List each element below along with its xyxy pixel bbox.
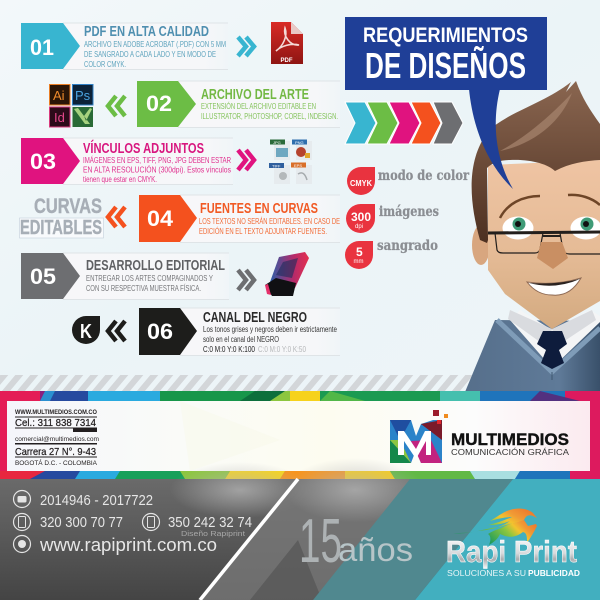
step 06: Canal del negro: solo en el canal del NEGRO bbox=[203, 335, 279, 344]
icon: PDF file: PDF bbox=[280, 58, 293, 64]
diagonal stripes band bbox=[0, 375, 472, 391]
icon: PDF file bbox=[271, 22, 303, 64]
character glasses bbox=[488, 232, 600, 254]
character eyes bbox=[502, 216, 600, 240]
step 05: Desarrollo editorial: ENTREGAR LOS ARTES COMPAGINADOS Y bbox=[86, 274, 214, 283]
contact details: Cel.: 311 838 7314 bbox=[15, 417, 96, 429]
character face bbox=[488, 160, 600, 329]
step 03: Vínculos adjuntos: IMÁGENES EN EPS, TIFF, PNG, JPG DEBEN ESTAR bbox=[83, 156, 231, 165]
step 03: Vínculos adjuntos bbox=[21, 138, 233, 184]
requirement: 5 mm bleed: 5 bbox=[356, 245, 363, 259]
illustration: curvas editables: EDITABLES bbox=[20, 217, 102, 239]
step 01: PDF en alta calidad: COLOR CMYK. bbox=[84, 60, 126, 69]
step 01: PDF en alta calidad bbox=[21, 23, 228, 70]
character ear bbox=[472, 225, 490, 265]
arrow: 05 to magazine bbox=[238, 270, 254, 290]
contact details bbox=[15, 409, 99, 467]
requirement: 5 mm bleed bbox=[345, 238, 438, 269]
requirement: 300 dpi images: dpi bbox=[355, 224, 363, 230]
character hair highlight bbox=[500, 93, 572, 151]
step 02: Archivo del arte: ILLUSTRATOR, PHOTOSHOP, COREL, INDESIGN. bbox=[201, 112, 338, 121]
logo: Rapi Print wordmark: Rapi Print bbox=[446, 534, 577, 569]
title speech bubble bbox=[345, 17, 547, 189]
requirement: CMYK colour mode: modo de color bbox=[378, 168, 470, 184]
requirement: 5 mm bleed: mm bbox=[354, 259, 364, 265]
icons: image file types: PNG bbox=[295, 140, 304, 145]
step 05: Desarrollo editorial: 05 bbox=[30, 264, 56, 289]
15 años: 15 bbox=[299, 507, 342, 576]
contact details: comercial@multimedios.com bbox=[15, 436, 99, 443]
contact: mobile numbers: 320 300 70 77 bbox=[40, 515, 123, 531]
15 años: años bbox=[338, 531, 413, 568]
step 02: Archivo del arte: ARCHIVO DEL ARTE bbox=[201, 87, 309, 103]
character nose bbox=[537, 242, 568, 269]
step 03: Vínculos adjuntos: tienen que estar en CMYK. bbox=[83, 175, 157, 184]
step 03: Vínculos adjuntos: 03 bbox=[30, 149, 56, 174]
step 06: Canal del negro: Los tonos grises y negros deben ir estrictamente bbox=[203, 325, 337, 334]
arrow: 02 to software icons bbox=[108, 96, 125, 116]
icons: design software bbox=[50, 84, 93, 127]
illustration: curvas editables: CURVAS bbox=[34, 195, 102, 218]
step 05: Desarrollo editorial: DESARROLLO EDITORIAL bbox=[86, 258, 225, 274]
icons: design software: Ai bbox=[53, 88, 65, 103]
step 03: Vínculos adjuntos: EN ALTA RESOLUCIÓN (300dpi). Estos vínculos bbox=[83, 166, 231, 174]
step 06: Canal del negro: C:0 M:0 Y:0 K:100 bbox=[203, 345, 255, 354]
step 06: Canal del negro: C:0 M:0 Y:0 K:50 bbox=[258, 345, 306, 354]
contact: website: www.rapiprint.com.co bbox=[39, 535, 217, 555]
requirement: 5 mm bleed: sangrado bbox=[377, 238, 438, 254]
logo: Rapi Print wordmark: SOLUCIONES A SU bbox=[447, 568, 526, 578]
contact: phone: 2014946 - 2017722 bbox=[40, 493, 153, 509]
step 04: Fuentes en curvas: LOS TEXTOS NO SERÁN EDITABLES. EN CASO DE bbox=[199, 217, 340, 226]
icon: magazine bbox=[265, 252, 309, 296]
illustration: curvas editables bbox=[20, 195, 104, 239]
contact: mobile numbers: Diseño Rapiprint bbox=[181, 529, 246, 538]
requirement: CMYK colour mode: CMYK bbox=[350, 179, 372, 188]
step 03: Vínculos adjuntos: VÍNCULOS ADJUNTOS bbox=[83, 140, 204, 157]
title speech bubble: DE DISEÑOS bbox=[365, 44, 526, 86]
arrow: 04 to curvas bbox=[108, 207, 125, 227]
logo: Multimedios wordmark: COMUNICACIÓN GRÁFICA bbox=[451, 448, 570, 457]
character mouth bbox=[527, 278, 581, 295]
requirement: 300 dpi images: 300 bbox=[351, 210, 371, 224]
footer background bbox=[0, 458, 600, 600]
contact panel bbox=[7, 401, 590, 471]
requirement: 300 dpi images bbox=[346, 204, 439, 233]
step 01: PDF en alta calidad: ARCHIVO EN ADOBE ACROBAT (.PDF) CON 5 MM bbox=[84, 40, 226, 49]
icons: design software: Id bbox=[54, 110, 65, 125]
step 02: Archivo del arte bbox=[137, 81, 340, 128]
contact details: WWW.MULTIMEDIOS.COM.CO bbox=[15, 409, 97, 416]
character: designer bbox=[465, 81, 600, 392]
icons: image file types: JPG bbox=[273, 140, 281, 145]
icons: design software: Ps bbox=[75, 88, 91, 103]
step 05: Desarrollo editorial bbox=[21, 253, 229, 300]
arrow: 01 to PDF bbox=[238, 37, 254, 56]
step 04: Fuentes en curvas: FUENTES EN CURVAS bbox=[200, 201, 318, 217]
title speech bubble: REQUERIMIENTOS bbox=[363, 24, 528, 47]
contact: mobile numbers bbox=[14, 514, 252, 538]
contact: mobile numbers: 350 242 32 74 bbox=[168, 515, 252, 531]
step 04: Fuentes en curvas: EDICIÓN EN EL TEXTO ADJUNTAR FUENTES. bbox=[199, 227, 327, 236]
step 05: Desarrollo editorial: CON SU RESPECTIVA MUESTRA FÍSICA. bbox=[86, 284, 201, 293]
arrow: 03 to file icons bbox=[238, 150, 254, 170]
icons: image file types bbox=[269, 140, 312, 184]
step 06: Canal del negro bbox=[139, 308, 340, 356]
logo: Rapi Print wordmark: PUBLICIDAD bbox=[528, 568, 580, 578]
character eyebrows bbox=[500, 195, 600, 218]
step 01: PDF en alta calidad: PDF EN ALTA CALIDAD bbox=[84, 24, 209, 40]
step 01: PDF en alta calidad: DE SANGRADO A CADA LADO Y EN MODO DE bbox=[84, 50, 216, 59]
character shirt and tie bbox=[508, 310, 600, 369]
requirement: 300 dpi images: imágenes bbox=[379, 204, 439, 220]
contact details: BOGOTÁ D.C. - COLOMBIA bbox=[15, 458, 98, 467]
icon: K black drop: K bbox=[80, 321, 92, 343]
character sweater bbox=[465, 320, 600, 392]
arrow: 06 to K bbox=[108, 321, 125, 341]
icons: image file types: TIFF bbox=[272, 164, 281, 168]
icons: image file types: EPS bbox=[294, 163, 302, 168]
step 02: Archivo del arte: 02 bbox=[146, 91, 172, 116]
step 06: Canal del negro: CANAL DEL NEGRO bbox=[203, 310, 307, 326]
step 04: Fuentes en curvas bbox=[139, 195, 340, 242]
logo: Multimedios wordmark: MULTIMEDIOS bbox=[451, 430, 569, 449]
requirement: CMYK colour mode bbox=[347, 167, 470, 195]
step 06: Canal del negro: 06 bbox=[147, 319, 173, 344]
character hair bbox=[472, 81, 600, 243]
15 años bbox=[299, 507, 413, 576]
contact: phone bbox=[14, 490, 153, 509]
step 02: Archivo del arte: EXTENSIÓN DEL ARCHIVO EDITABLE EN bbox=[201, 102, 316, 111]
logo: Rapi Print horse bbox=[453, 509, 537, 545]
contact details: Carrera 27 N°. 9-43 bbox=[15, 446, 96, 458]
chevrons: five steps bbox=[345, 102, 463, 144]
step 04: Fuentes en curvas: 04 bbox=[147, 206, 174, 231]
rainbow band bbox=[0, 391, 600, 479]
logo: Multimedios mark bbox=[390, 410, 448, 463]
icon: K black drop bbox=[72, 316, 100, 344]
background bbox=[0, 0, 600, 392]
logo: Multimedios wordmark bbox=[451, 430, 570, 457]
step 01: PDF en alta calidad: 01 bbox=[30, 35, 54, 60]
